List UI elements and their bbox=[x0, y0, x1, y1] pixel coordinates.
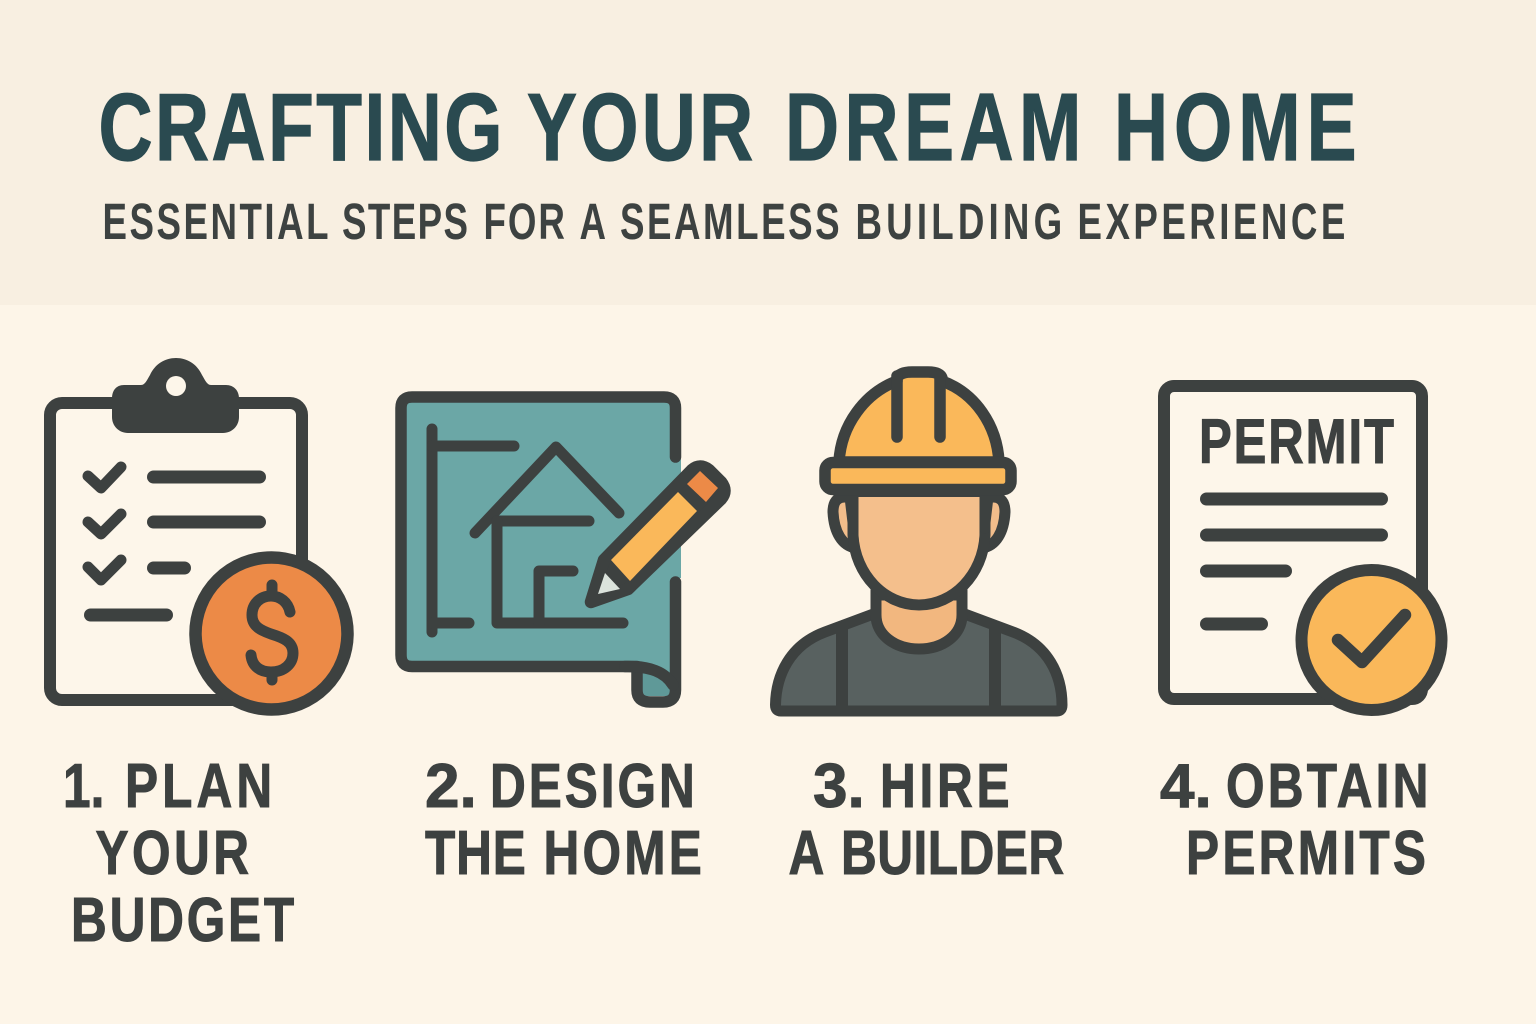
step 1 label bbox=[63, 751, 294, 954]
step 3 label: HIRE bbox=[880, 751, 1010, 820]
subtitle: SEAMLESS bbox=[620, 194, 840, 250]
step 2 label: THE bbox=[425, 818, 526, 887]
icon: dollar coin bbox=[196, 558, 348, 710]
step 1 label: 1. bbox=[63, 751, 104, 820]
title: YOUR bbox=[527, 74, 753, 181]
checklist marks bbox=[88, 467, 260, 615]
house plan lines bbox=[432, 429, 623, 632]
permit text lines bbox=[1206, 499, 1382, 624]
subtitle: STEPS bbox=[342, 194, 468, 250]
step 4 label: 4. bbox=[1160, 752, 1212, 821]
subtitle: EXPERIENCE bbox=[1078, 194, 1345, 250]
title: CRAFTING bbox=[98, 74, 503, 181]
icon: pencil bbox=[591, 466, 724, 602]
step 4 label: OBTAIN bbox=[1226, 751, 1428, 820]
subtitle: A bbox=[580, 194, 606, 250]
builder neck bbox=[876, 595, 962, 649]
permit label: PERMIT bbox=[1199, 406, 1394, 476]
builder face bbox=[853, 495, 985, 605]
step 4 label: PERMITS bbox=[1186, 818, 1426, 887]
hard hat bbox=[839, 372, 999, 462]
step 3 label: 3. bbox=[813, 752, 865, 821]
builder body bbox=[776, 613, 1062, 711]
icon: builder with hard hat bbox=[776, 372, 1062, 711]
subtitle: FOR bbox=[484, 194, 565, 250]
subtitle: ESSENTIAL bbox=[102, 194, 329, 250]
icon: blueprint with house and pencil bbox=[401, 397, 724, 702]
step 3 label: BUILDER bbox=[841, 818, 1064, 887]
title: HOME bbox=[1114, 74, 1357, 181]
icon: check badge bbox=[1302, 570, 1442, 710]
step 1 label: YOUR bbox=[96, 818, 249, 887]
step 1 label: BUDGET bbox=[71, 885, 294, 954]
step 4 label bbox=[1160, 751, 1428, 887]
step 1 label: PLAN bbox=[125, 751, 272, 820]
step 3 label bbox=[788, 751, 1064, 887]
builder ears bbox=[833, 497, 1005, 548]
title: DREAM bbox=[785, 74, 1081, 181]
step 2 label bbox=[425, 751, 702, 887]
icon: clipboard clip bbox=[112, 358, 239, 433]
subtitle bbox=[102, 194, 1345, 250]
step 2 label: DESIGN bbox=[490, 751, 695, 820]
subtitle: BUILDING bbox=[856, 194, 1062, 250]
title bbox=[98, 74, 1357, 181]
step 2 label: 2. bbox=[425, 752, 477, 821]
icon: permit document bbox=[1164, 386, 1442, 710]
step 3 label: A bbox=[788, 818, 824, 887]
header band bbox=[0, 0, 1536, 305]
step 2 label: HOME bbox=[544, 818, 702, 887]
icon: clipboard with budget checklist bbox=[50, 358, 348, 710]
